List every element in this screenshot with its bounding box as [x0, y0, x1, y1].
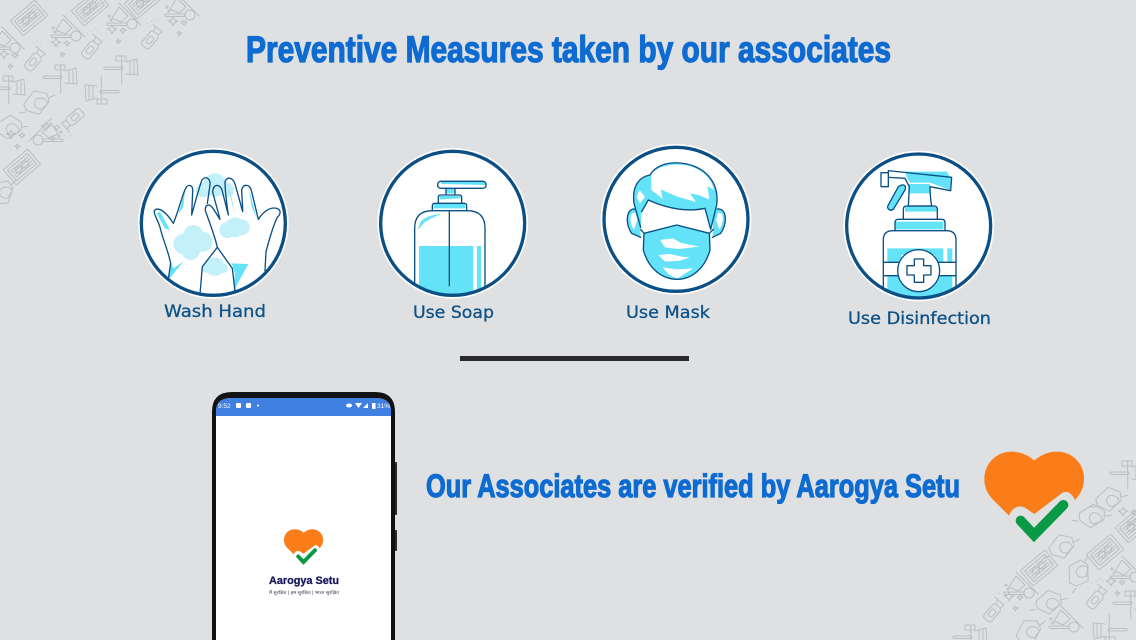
app name: Aarogya Setu [269, 575, 339, 587]
panel: use mask [601, 144, 751, 323]
app tagline: मैं सुरक्षित | हम सुरक्षित | भारत सुरक्षित [269, 589, 339, 596]
label: use disinfection: Use Disinfection [848, 309, 991, 329]
icon: disinfectant spray [843, 151, 994, 301]
title: Preventive Measures taken by our associates [246, 29, 891, 70]
label: use mask: Use Mask [626, 303, 710, 323]
label: wash hand: Wash Hand [164, 302, 266, 322]
icon: wash hand [138, 148, 289, 299]
heading: verified by Aarogya Setu: Our Associates are verified by Aarogya Setu [426, 468, 960, 504]
logo: Aarogya Setu heart [984, 452, 1084, 535]
icon: face mask [601, 144, 751, 295]
panel: wash hand [138, 148, 289, 322]
ears [628, 208, 725, 237]
label: use soap: Use Soap [413, 303, 494, 323]
phone body [212, 392, 395, 640]
icon: soap bottle [377, 148, 528, 299]
divider bar [460, 356, 689, 361]
panel: use soap [377, 148, 528, 323]
hair [634, 163, 717, 229]
decorative cleaning pattern: top left corner [0, 0, 199, 209]
phone screen [216, 398, 391, 640]
status bar [216, 398, 391, 416]
panel: use disinfection [843, 151, 994, 329]
mask [643, 225, 711, 279]
phone mockup [212, 392, 397, 640]
status bar: 31% [377, 403, 390, 410]
decorative cleaning pattern: bottom right corner [953, 461, 1136, 640]
logo: small heart [284, 529, 323, 562]
status bar: 9:52 [218, 403, 231, 410]
phone side buttons [394, 462, 397, 551]
